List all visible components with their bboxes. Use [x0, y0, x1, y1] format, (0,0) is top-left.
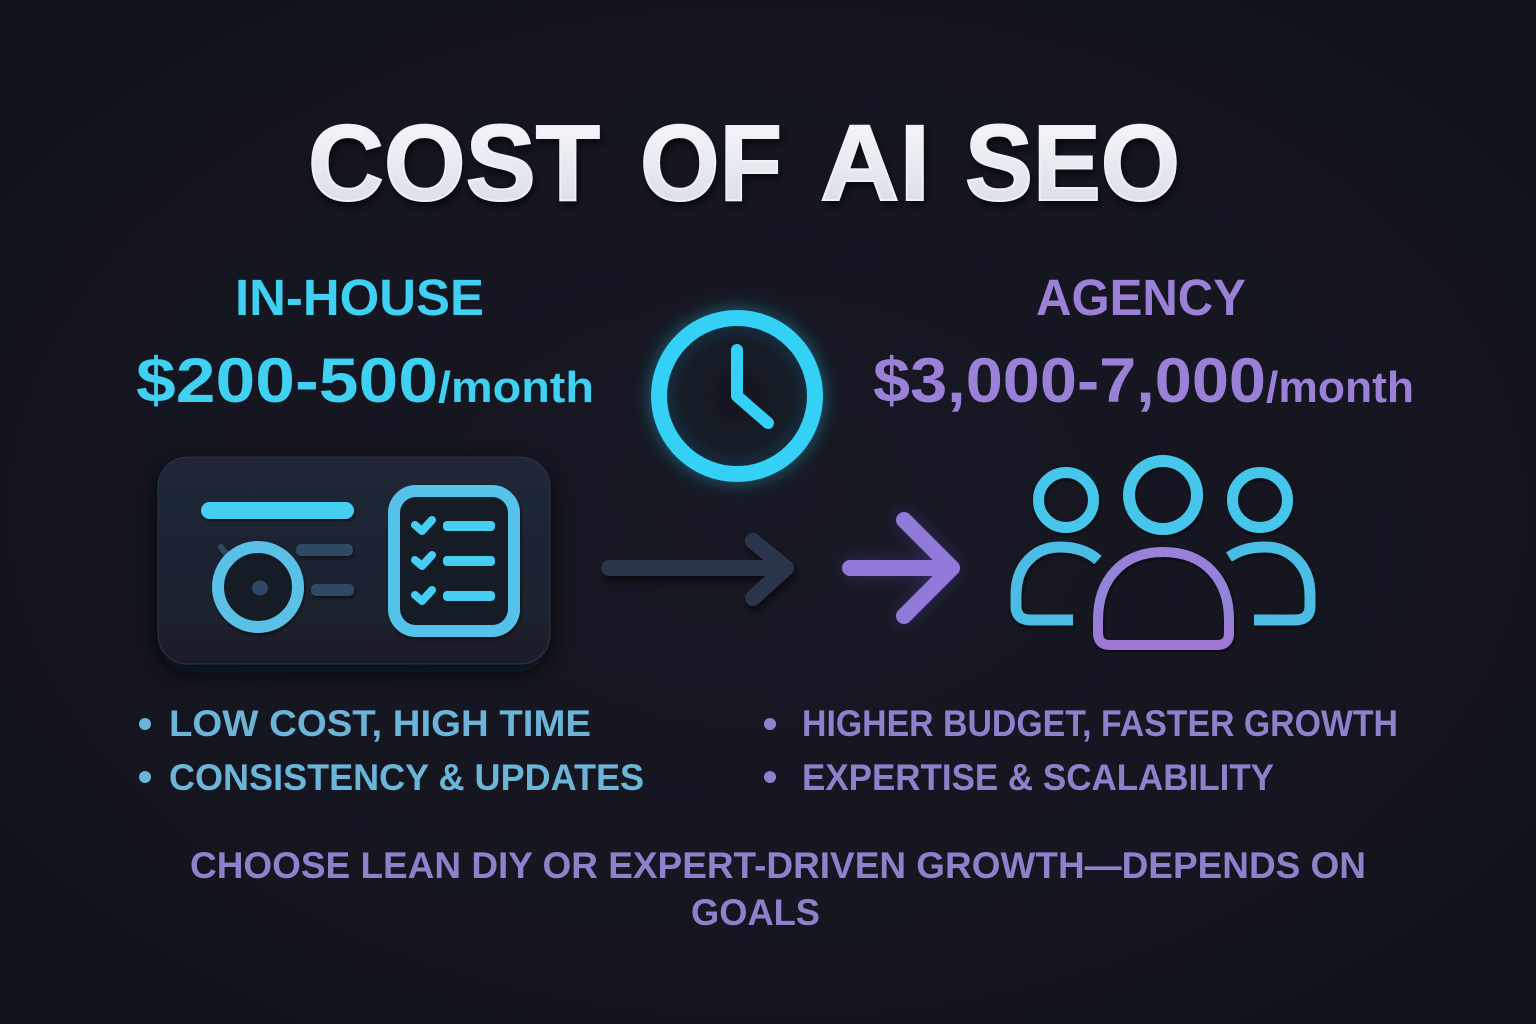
bullet list: agency	[764, 703, 1398, 798]
price unit: agency: /month	[1266, 363, 1414, 412]
dark status bars	[296, 544, 354, 596]
heading: agency: AGENCY	[1036, 269, 1246, 326]
icon: team	[1016, 461, 1310, 645]
right person	[1229, 472, 1310, 620]
price: agency: $3,000-7,000	[873, 346, 1266, 416]
panel: in-house heading and price	[136, 269, 594, 416]
price: in-house: $200-500	[136, 346, 438, 416]
title: OF	[640, 102, 782, 223]
arrow: dark	[609, 541, 786, 598]
icon: checklist	[394, 491, 514, 631]
panel: agency heading and price	[873, 269, 1414, 416]
panel: in-house tools card	[158, 457, 550, 664]
title	[308, 102, 1180, 223]
icon: clock	[659, 318, 815, 474]
heading: in-house: IN-HOUSE	[235, 269, 484, 326]
icon: stopwatch dial	[218, 547, 298, 627]
price unit: in-house: /month	[438, 363, 594, 412]
header bar	[201, 502, 354, 519]
left person	[1016, 472, 1098, 620]
conclusion text: GOALS	[691, 892, 820, 933]
arrow: purple	[850, 520, 952, 616]
bullet list: in-house: CONSISTENCY & UPDATES	[169, 757, 644, 798]
title: AI	[820, 102, 930, 223]
title: COST	[308, 102, 600, 223]
bullet list: in-house	[139, 703, 644, 798]
bullet list: agency: EXPERTISE & SCALABILITY	[802, 757, 1274, 798]
bullet list: agency: HIGHER BUDGET, FASTER GROWTH	[802, 703, 1398, 744]
conclusion text: CHOOSE LEAN DIY OR EXPERT-DRIVEN GROWTH—DEPENDS ON	[190, 845, 1366, 886]
bullet list: in-house: LOW COST, HIGH TIME	[169, 703, 591, 744]
title: SEO	[965, 102, 1180, 223]
centre person	[1098, 461, 1229, 645]
conclusion text	[190, 845, 1366, 933]
